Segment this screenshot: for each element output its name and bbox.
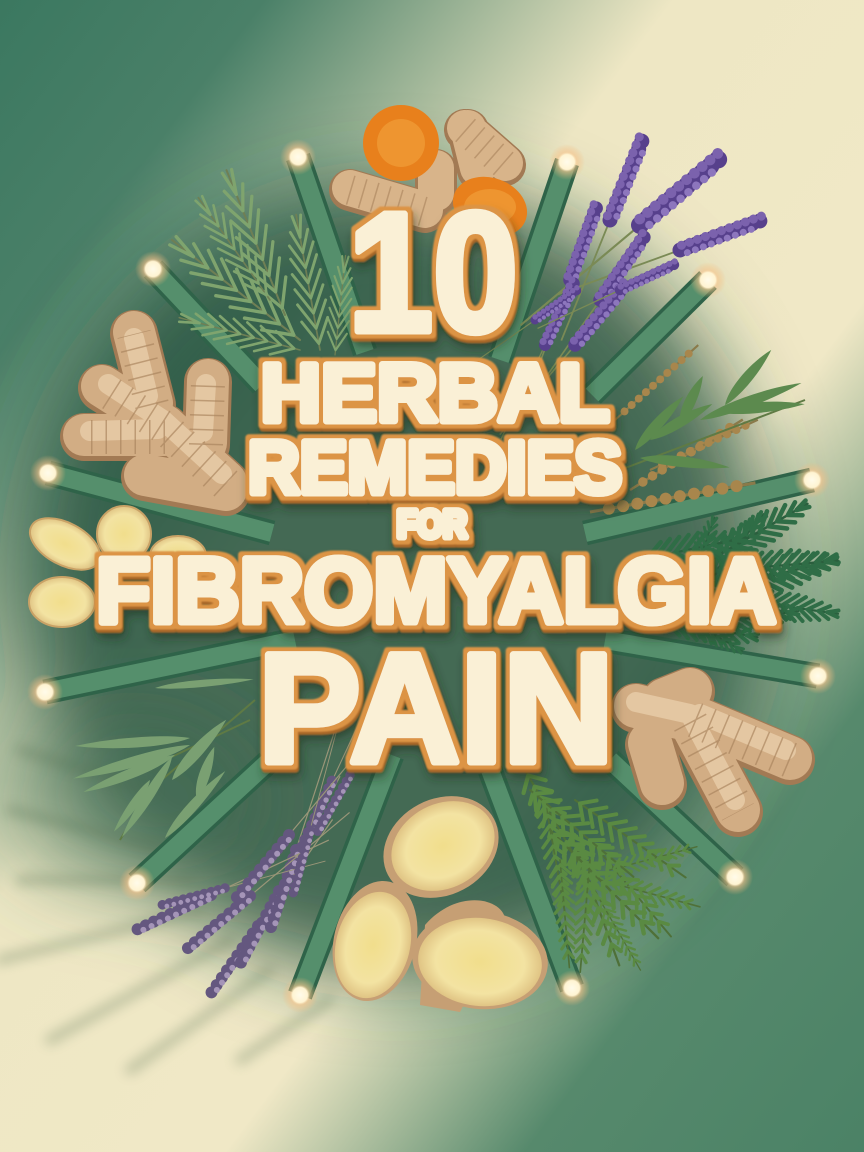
lavender upper right [470, 133, 768, 441]
cast shadows of herbs [0, 750, 330, 1070]
ginger root right [636, 690, 790, 812]
turmeric slice 2 [444, 167, 536, 247]
rosemary upper left [162, 164, 356, 363]
title line: HERBAL: HERBAL [260, 348, 610, 439]
bar 1 [280, 139, 365, 352]
lavender lower left [135, 675, 404, 997]
bar 11 [282, 755, 392, 1013]
ginger slices bottom [320, 776, 553, 1016]
bar 6 [30, 455, 272, 533]
bar 4 [135, 251, 262, 385]
bar 7 [27, 640, 295, 710]
bar 9 [610, 760, 753, 895]
title line: FIBROMYALGIA: FIBROMYALGIA [96, 540, 776, 642]
bar 2 [500, 144, 585, 360]
sage leaves lower left [72, 675, 255, 841]
bar 12 [490, 770, 590, 1006]
title line: REMEDIES: REMEDIES [248, 426, 622, 509]
ginger root upper left [84, 332, 226, 492]
title [96, 178, 776, 796]
fern right [637, 491, 842, 659]
central shadow [0, 185, 765, 975]
bar 5 [585, 462, 830, 533]
ginger and turmeric top [350, 105, 536, 247]
ginger slices left [22, 506, 206, 627]
olive herb and seed sprigs right [590, 345, 805, 512]
turmeric slice 1 [363, 105, 439, 181]
thyme lower right [514, 764, 702, 974]
title line: 10: 10 [348, 178, 518, 368]
bar 3 [592, 262, 726, 395]
title line: PAIN: PAIN [258, 622, 614, 796]
title line: FOR: FOR [397, 504, 467, 546]
glowing green bars [27, 139, 836, 1013]
bar 10 [119, 762, 268, 901]
bar 8 [605, 640, 836, 694]
